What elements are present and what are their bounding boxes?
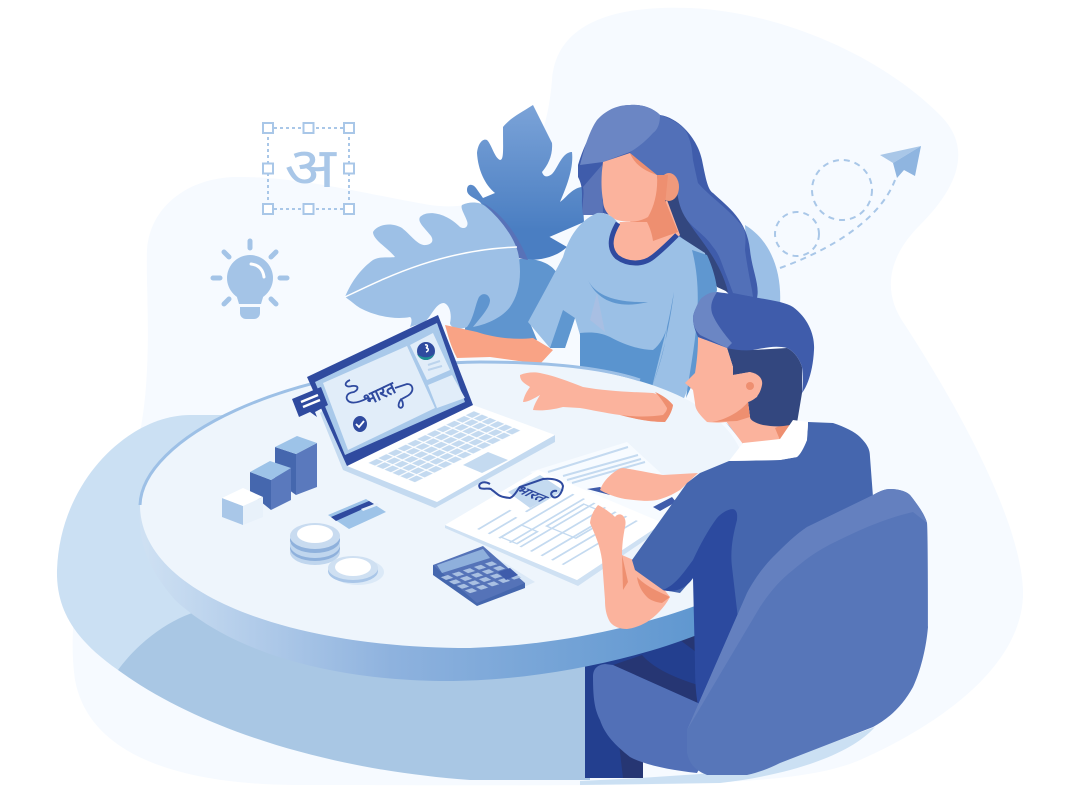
woman: neck and shadow	[606, 200, 680, 268]
woman: shirt	[528, 213, 707, 405]
coins	[290, 523, 384, 585]
document signature: भारत	[511, 484, 552, 504]
legs under table	[585, 630, 705, 778]
blocks: three cubes	[222, 436, 317, 525]
calculator	[433, 546, 535, 606]
documents	[445, 442, 690, 586]
laptop: screen shadow	[320, 408, 350, 470]
man: woman's sleeve edge behind neck	[725, 422, 743, 443]
woman: ear	[659, 173, 679, 201]
plant: dark back leaf	[467, 105, 584, 260]
woman: front hair	[580, 105, 660, 165]
icon: light bulb	[213, 241, 287, 319]
floor shadow under table	[118, 612, 590, 780]
chair: highlight	[687, 489, 927, 730]
laptop: panel lines	[428, 361, 442, 370]
credit card	[328, 499, 386, 529]
laptop: screen frame	[307, 315, 473, 466]
woman: pointing arm	[520, 372, 673, 422]
chair	[593, 489, 928, 775]
man: near arm	[590, 505, 670, 629]
back document	[530, 442, 690, 540]
laptop: signature: भारत	[361, 378, 400, 410]
document signature	[479, 479, 563, 504]
woman: left arm	[445, 325, 553, 364]
man: neck	[725, 417, 793, 444]
man: ear	[733, 372, 762, 402]
woman: bust curve	[588, 280, 648, 305]
woman: face	[602, 153, 657, 222]
icon: selection box with letter: अ	[284, 138, 338, 200]
woman: face shadow	[630, 153, 668, 222]
laptop	[307, 315, 555, 508]
man	[590, 292, 873, 705]
woman: back hair outline	[578, 105, 758, 298]
woman: shirt lower shade	[580, 327, 667, 387]
woman: main hair	[630, 115, 753, 297]
chair: back	[687, 489, 928, 775]
table side	[140, 505, 700, 681]
floor highlight below chair	[580, 727, 875, 785]
icon: selection box with letter	[263, 123, 354, 214]
laptop: keyboard	[367, 411, 522, 483]
man: back hair	[727, 348, 802, 426]
plant: leaf shadow	[483, 203, 528, 260]
speech bubble	[292, 387, 328, 417]
woman: neckline	[611, 223, 677, 263]
table top	[140, 362, 745, 648]
man: shirt dark side	[663, 509, 745, 705]
laptop: display	[323, 346, 435, 450]
man: top hair	[693, 292, 814, 393]
woman: shirt right shade	[686, 250, 717, 398]
laptop: check badge	[353, 416, 367, 432]
man: shirt	[632, 422, 873, 680]
plant: light front leaf	[345, 202, 520, 328]
man: face	[685, 337, 762, 423]
woman: hair dark strand	[665, 190, 728, 292]
woman: blue backdrop shape	[745, 225, 780, 305]
woman: sleeve shade	[550, 310, 575, 348]
woman: left hair underside	[582, 165, 603, 215]
woman: shirt highlight	[590, 293, 605, 332]
chair: seat	[593, 664, 720, 773]
form lines	[478, 485, 637, 565]
plant: lower leaf	[463, 259, 557, 340]
laptop: base	[343, 435, 555, 508]
front document	[445, 523, 663, 586]
laptop: signature	[346, 378, 412, 410]
man: far hand on paper	[600, 468, 698, 501]
man: collar	[729, 420, 808, 461]
icon: paper plane with dashed trail	[775, 146, 921, 268]
woman	[445, 105, 780, 405]
light blob behind table	[57, 415, 330, 670]
laptop: logo badge	[417, 342, 435, 360]
